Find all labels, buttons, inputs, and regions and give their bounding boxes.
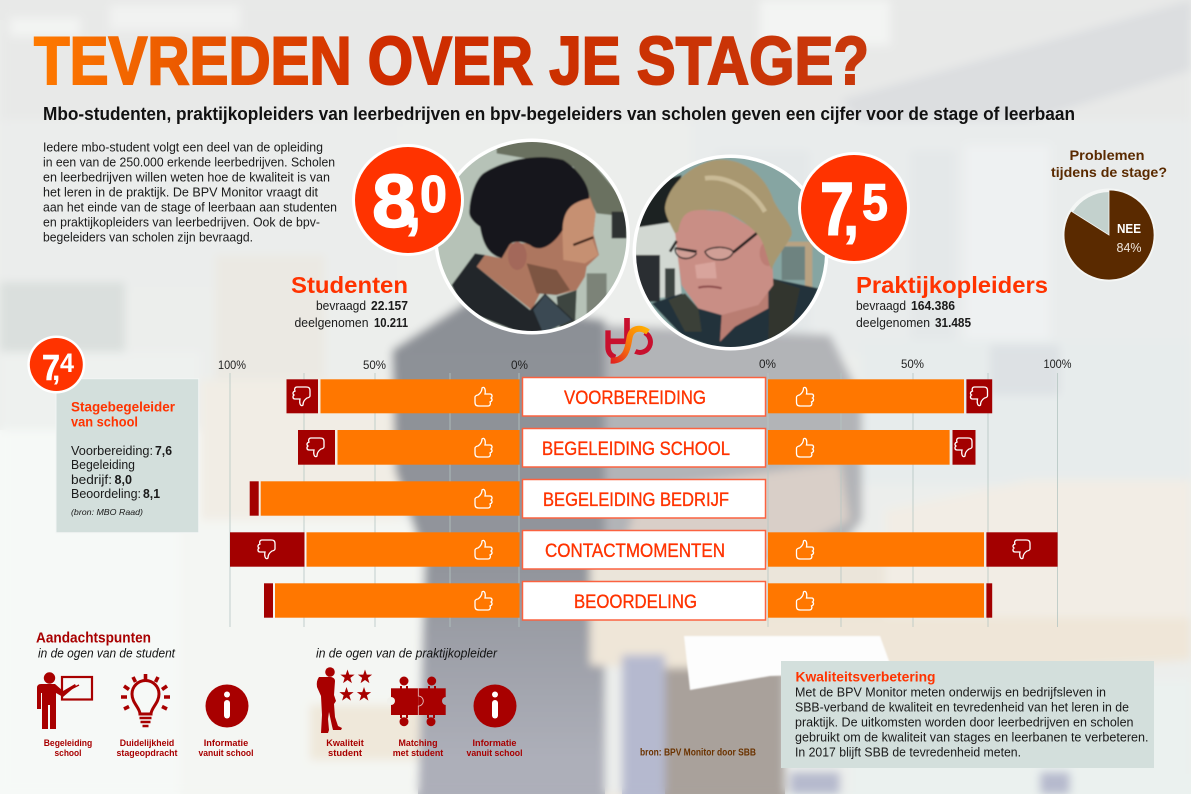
icon captions: Kwaliteit [326, 738, 365, 749]
intro text block: het leren in de praktijk. De BPV Monitor vraagt dit [43, 186, 319, 200]
heading: Studenten with counts: Studenten [291, 272, 408, 298]
heading: Praktijkopleiders with counts: bevraagd [856, 298, 906, 313]
panel: stagebegeleider van school: Stagebegeleider [71, 399, 176, 415]
panel: stagebegeleider van school: Beoordeling: [71, 486, 141, 501]
panel: stagebegeleider van school [56, 379, 199, 533]
icon: info (praktijkopleider) [474, 684, 516, 728]
logo: SBB [608, 318, 650, 361]
icon: light bulb [121, 674, 170, 726]
score badge: students 8,0: , [405, 175, 421, 240]
panel: stagebegeleider van school: 8,0 [114, 472, 132, 487]
panel: kwaliteitsverbetering: In 2017 blijft SBB de tevredenheid meten. [795, 746, 1021, 760]
score badge: praktijkopleiders 7,5 [798, 152, 910, 264]
icon captions: school [54, 748, 82, 759]
icon captions: student [328, 748, 363, 759]
score badge: stagebegeleider 7,4: , [52, 354, 60, 387]
icon captions: vanuit school [466, 748, 522, 759]
icon: puzzle pieces [387, 676, 450, 726]
heading: Studenten with counts [291, 272, 408, 330]
intro text block: en leerbedrijven willen weten hoe de kwaliteit is van [43, 170, 330, 184]
heading: aandachtspunten [36, 631, 175, 661]
panel: stagebegeleider van school: (bron: MBO Raad) [71, 507, 143, 517]
heading: Praktijkopleiders with counts: deelgenomen [856, 315, 930, 330]
icon captions: met student [393, 748, 444, 759]
panel: stagebegeleider van school: Begeleiding [71, 457, 135, 472]
axis labels: 0% [759, 359, 776, 371]
intro text block [43, 140, 337, 244]
score badge: stagebegeleider 7,4 [27, 336, 85, 394]
icon captions: Matching [398, 738, 438, 749]
heading: aandachtspunten: Aandachtspunten [36, 631, 151, 647]
axis labels: 50% [363, 360, 386, 372]
subtitle: Mbo-studenten, praktijkopleiders van leerbedrijven en bpv-begeleiders van scholen geven een cijfer voor de stage of leerbaan [43, 103, 1075, 124]
pie chart: problemen tijdens de stage: Problemen [1070, 147, 1144, 163]
bar chart: student scores (left) [230, 379, 520, 618]
portrait: student [435, 138, 630, 334]
axis labels: 100% [1044, 359, 1072, 371]
category labels: VOORBEREIDING [564, 387, 706, 409]
panel: stagebegeleider van school: van school [71, 414, 138, 430]
icon captions [44, 738, 522, 759]
axis labels: 0% [511, 360, 528, 372]
heading: Praktijkopleiders with counts: 164.386 [911, 298, 955, 313]
heading: in de ogen van de praktijkopleider: in de ogen van de praktijkopleider [316, 647, 498, 661]
panel: kwaliteitsverbetering: Met de BPV Monitor meten onderwijs en bedrijfsleven in [795, 686, 1106, 700]
heading: aandachtspunten: in de ogen van de student [38, 647, 175, 661]
panel: stagebegeleider van school: 7,6 [155, 443, 172, 458]
axis labels: 100% [218, 360, 246, 372]
title: TEVREDEN OVER JE STAGE? [34, 23, 869, 99]
heading: Studenten with counts: 22.157 [371, 298, 408, 313]
score badge: praktijkopleiders 7,5: 5 [862, 174, 888, 232]
panel: kwaliteitsverbetering: praktijk. De uitkomsten worden door leerbedrijven en scholen [795, 716, 1134, 730]
score badge: stagebegeleider 7,4: 7 [42, 347, 60, 388]
pie chart: problemen tijdens de stage: tijdens de stage? [1051, 164, 1167, 180]
icon: teacher at board [37, 672, 92, 729]
panel: stagebegeleider van school: 8,1 [143, 486, 160, 501]
category labels: BEGELEIDING BEDRIJF [543, 489, 729, 511]
portrait: praktijkopleider [632, 154, 828, 350]
category labels: BEOORDELING [574, 591, 697, 613]
panel: kwaliteitsverbetering: gebruikt om de kwaliteit van stages en leerbanen te verbeteren. [795, 731, 1148, 745]
heading: Praktijkopleiders with counts: 31.485 [935, 315, 971, 330]
heading: Studenten with counts: deelgenomen [294, 315, 368, 330]
icon captions: Duidelijkheid [120, 738, 174, 749]
heading: Studenten with counts: bevraagd [316, 298, 366, 313]
heading: Praktijkopleiders with counts: Praktijkopleiders [856, 272, 1048, 298]
panel: stagebegeleider van school: bedrijf: [71, 472, 112, 487]
score badge: praktijkopleiders 7,5: 7 [820, 167, 854, 251]
axis labels: 50% [901, 359, 924, 371]
intro text block: Iedere mbo-student volgt een deel van de opleiding [43, 140, 323, 154]
icon captions: Begeleiding [44, 738, 92, 749]
pie chart: problemen tijdens de stage: NEE [1117, 221, 1141, 236]
heading: Studenten with counts: 10.211 [374, 315, 408, 330]
intro text block: aan het einde van de stage of leerbaan aan studenten [43, 200, 337, 214]
score badge: students 8,0: 0 [420, 166, 447, 224]
panel: kwaliteitsverbetering [781, 661, 1154, 768]
score badge: stagebegeleider 7,4: 4 [60, 348, 74, 378]
intro text block: in een van de 250.000 erkende leerbedrijven. Scholen [43, 156, 335, 170]
icon: info (student) [206, 684, 248, 728]
score badge: praktijkopleiders 7,5: , [843, 183, 859, 248]
source note: bron: BPV Monitor door SBB [640, 748, 756, 759]
intro text block: begeleiders van scholen zijn bevraagd. [43, 230, 253, 244]
icon: person with stars [317, 667, 372, 733]
score badge: students 8,0: 8 [372, 159, 416, 243]
category labels: BEGELEIDING SCHOOL [542, 438, 730, 460]
icon captions: vanuit school [198, 748, 254, 759]
pie chart: problemen tijdens de stage [1051, 147, 1167, 282]
score badge: students 8,0 [352, 144, 464, 256]
intro text block: en praktijkopleiders van leerbedrijven. Ook de bpv- [43, 216, 320, 230]
icon captions: Informatie [204, 738, 248, 749]
heading: Praktijkopleiders with counts [856, 272, 1048, 330]
category labels [522, 378, 766, 620]
axis grid lines [230, 373, 1058, 627]
panel: kwaliteitsverbetering: Kwaliteitsverbetering [796, 669, 936, 685]
icon captions: stageopdracht [116, 748, 178, 759]
axis labels [218, 359, 1072, 372]
panel: stagebegeleider van school: Voorbereiding: [71, 443, 153, 458]
category labels: CONTACTMOMENTEN [545, 540, 725, 562]
bar chart: praktijkopleider scores (right) [768, 379, 1058, 618]
panel: kwaliteitsverbetering: SBB-verband de kwaliteit en tevredenheid van het leren in de [795, 701, 1129, 715]
icon captions: Informatie [472, 738, 516, 749]
pie chart: problemen tijdens de stage: 84% [1116, 241, 1142, 255]
